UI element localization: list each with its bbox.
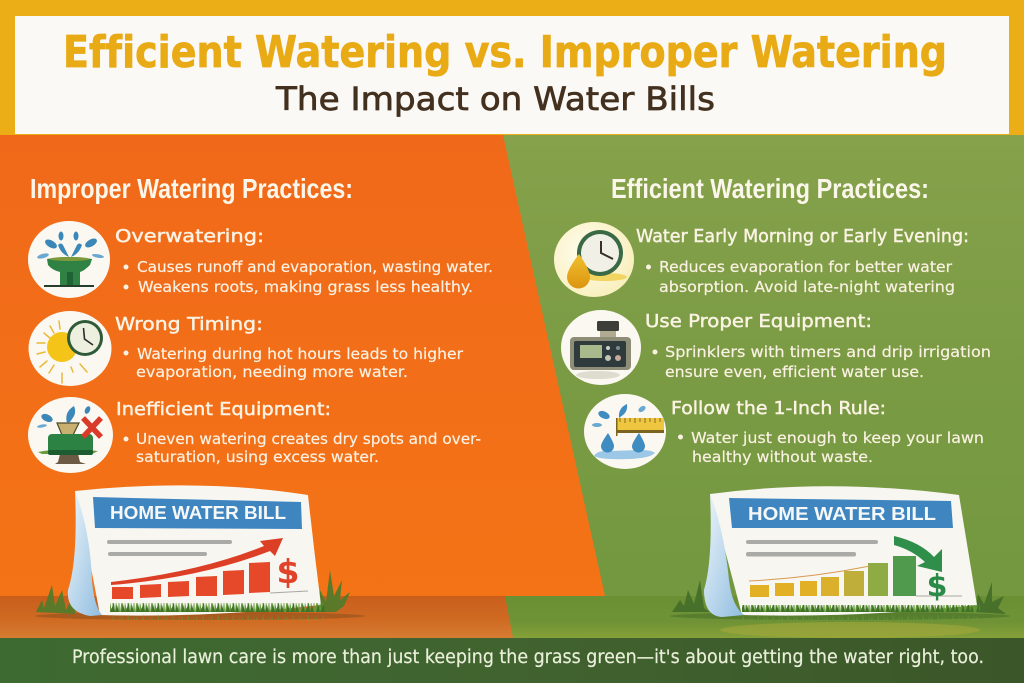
bullet text: sprinklers with timers: ensure even, efficient water use. — [665, 363, 924, 381]
item: proper equipment — [561, 310, 991, 385]
bill text lines — [746, 540, 878, 556]
bill banner text: HOME WATER BILL — [110, 502, 286, 523]
dollar sign: green: $ — [927, 569, 947, 604]
panel: efficient watering — [554, 173, 991, 469]
grass in front of bill — [110, 603, 325, 620]
bullet text: uneven watering — [124, 430, 481, 466]
heading: early watering: Water Early Morning or Early Evening: — [636, 226, 969, 247]
item: wrong timing — [28, 311, 464, 386]
bill banner — [93, 497, 302, 529]
bullet text: hot hours: Watering during hot hours leads to higher — [137, 345, 464, 363]
illustration: falling water bill — [672, 486, 1006, 621]
bill curl — [68, 491, 102, 616]
heading: overwatering: Overwatering: — [115, 226, 264, 247]
panel: improper watering — [28, 173, 493, 473]
heading: efficient practices: Efficient Watering Practices: — [611, 173, 929, 204]
icon: ruler and drops — [584, 394, 666, 469]
orange background panel — [0, 135, 605, 596]
heading: inefficient equipment: Inefficient Equipment: — [116, 399, 331, 420]
heading: one inch rule: Follow the 1-Inch Rule: — [671, 398, 886, 419]
bullet text: water just enough: healthy without waste. — [692, 448, 873, 466]
bullet text: causes runoff: Causes runoff and evaporation, wasting water. — [137, 258, 493, 276]
bullet text: weakens roots: Weakens roots, making grass less healthy. — [138, 278, 473, 296]
item: early watering — [554, 222, 969, 297]
bill banner text: HOME WATER BILL — [748, 503, 936, 524]
grass tufts behind bill — [672, 580, 1006, 614]
gold header background — [0, 0, 1024, 135]
bill banner — [729, 498, 953, 528]
bullet text: reduces evaporation — [646, 258, 955, 296]
bullet text: hot hours — [124, 345, 464, 381]
grass tufts behind bill — [36, 570, 350, 614]
bullet text: sprinklers with timers: Sprinklers with timers and drip irrigation — [665, 343, 991, 361]
green background panel — [0, 135, 1024, 596]
illustration: rising water bill — [36, 485, 350, 620]
arrow: falling cost — [894, 536, 942, 572]
bill curl — [704, 494, 744, 617]
heading: wrong timing: Wrong Timing: — [115, 314, 263, 335]
bullet text: sprinklers with timers — [652, 343, 991, 381]
arrow: rising cost — [111, 538, 283, 585]
footer text: Professional lawn care is more than just keeping the grass green—it's about getting the water right, too. — [72, 647, 984, 668]
bill paper — [75, 485, 321, 616]
bill text lines — [107, 540, 232, 556]
item: inefficient equipment — [28, 397, 481, 473]
icon: sun and clock — [28, 311, 112, 386]
bullet text: uneven watering: Uneven watering creates dry spots and over- — [136, 430, 481, 448]
footer band — [0, 638, 1024, 683]
item: one inch rule — [584, 394, 984, 469]
bar chart: improving — [750, 556, 916, 597]
bullet text: reduces evaporation: Reduces evaporation for better water — [659, 258, 953, 276]
bullet text: uneven watering: saturation, using excess water. — [136, 448, 379, 466]
grass in front of bill — [742, 605, 980, 621]
bill paper — [710, 486, 977, 616]
bullet text: water just enough: Water just enough to keep your lawn — [691, 429, 984, 447]
icon: sprinkler overflow — [28, 221, 110, 298]
icon: broken sprinkler — [28, 397, 113, 473]
bullet text: water just enough — [678, 429, 984, 466]
green lawn ground — [500, 596, 1024, 638]
title panel — [15, 16, 1009, 134]
heading: proper equipment: Use Proper Equipment: — [645, 311, 872, 332]
dry soil ground — [0, 596, 513, 638]
dollar sign: red: $ — [277, 552, 299, 591]
icon: clock and drop — [554, 222, 634, 297]
bullet text: reduces evaporation: absorption. Avoid late-night watering — [659, 278, 955, 296]
bar chart: rising — [112, 562, 270, 599]
bullet text: hot hours: evaporation, needing more water. — [136, 363, 408, 381]
icon: irrigation timer — [561, 310, 641, 385]
subtitle: The Impact on Water Bills — [275, 80, 715, 118]
item: overwatering — [28, 221, 493, 298]
heading: improper practices: Improper Watering Practices: — [30, 173, 353, 204]
